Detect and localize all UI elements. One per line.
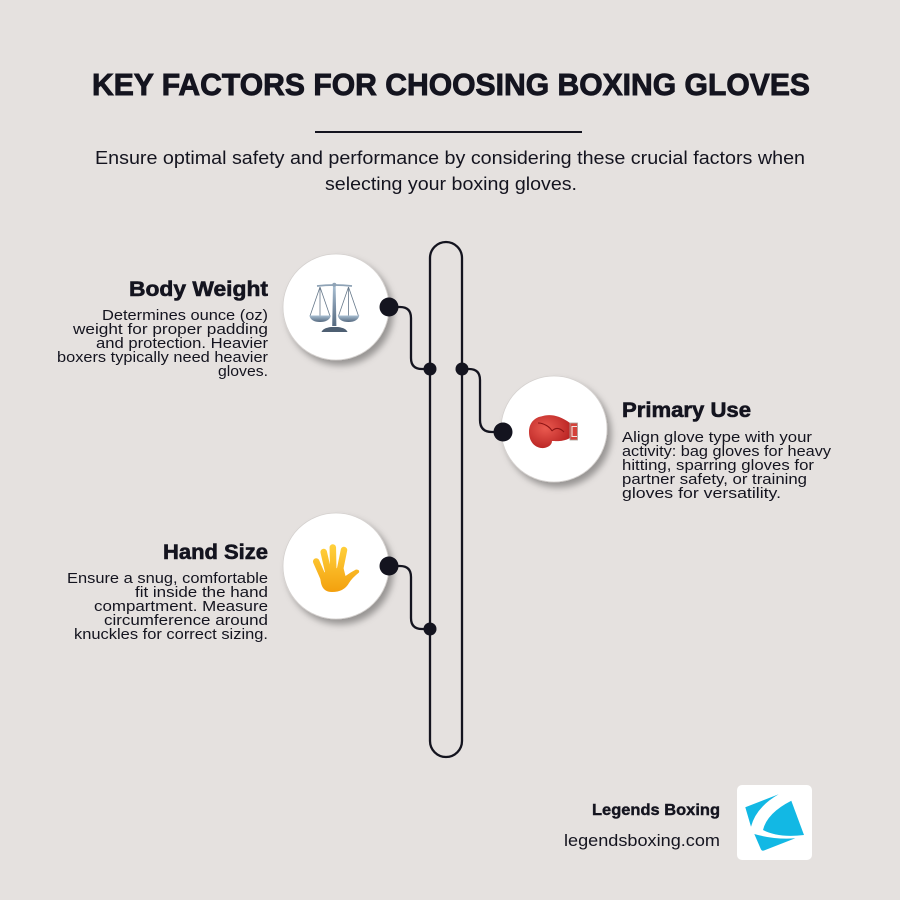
text: body weight description: boxers typically need heavier [57,349,268,366]
heading: primary use: Primary Use [622,399,751,422]
text: body weight description [57,307,268,380]
footer brand [564,785,812,860]
subtitle [95,148,805,194]
icon: boxing glove [529,415,578,448]
panel: hand size [67,513,436,643]
icon circle: scales [283,254,389,360]
text: body weight description: weight for proper padding [72,321,268,338]
text: hand size description: Ensure a snug, comfortable [67,570,268,587]
logo [737,785,812,860]
panel: body weight [57,254,436,380]
heading: hand size: Hand Size [163,541,268,564]
text: primary use description: Align glove type with your [622,429,812,446]
timeline pill [430,242,462,757]
panel: primary use [456,362,832,502]
text: body weight description: Determines ounce (oz) [102,307,268,324]
icon circle: glove [501,376,607,482]
text: primary use description: hitting, sparring gloves for [622,457,814,474]
connector: primary use [462,369,503,432]
connector: body weight [389,307,430,369]
text: primary use description: partner safety, or training [622,471,807,488]
heading: body weight: Body Weight [129,278,268,301]
brand name: Legends Boxing [592,802,720,819]
title: KEY FACTORS FOR CHOOSING BOXING GLOVES [92,67,810,102]
icon: balance scales [309,283,359,332]
subtitle: Ensure optimal safety and performance by considering these crucial factors when [95,148,805,168]
icon circle: hand [283,513,389,619]
text: hand size description: knuckles for correct sizing. [74,626,268,643]
text: primary use description: gloves for versatility. [622,485,781,502]
connector: hand size [389,566,430,629]
text: hand size description: compartment. Measure [94,598,268,615]
subtitle: selecting your boxing gloves. [325,174,577,194]
text: hand size description: fit inside the hand [135,584,268,601]
text: body weight description: gloves. [218,363,268,380]
text: hand size description [67,570,268,643]
text: body weight description: and protection. Heavier [96,335,268,352]
text: primary use description: activity: bag gloves for heavy [622,443,832,460]
text: primary use description [622,429,832,502]
text: hand size description: circumference around [104,612,268,629]
brand url: legendsboxing.com [564,831,720,850]
icon: raised hand [316,548,359,592]
